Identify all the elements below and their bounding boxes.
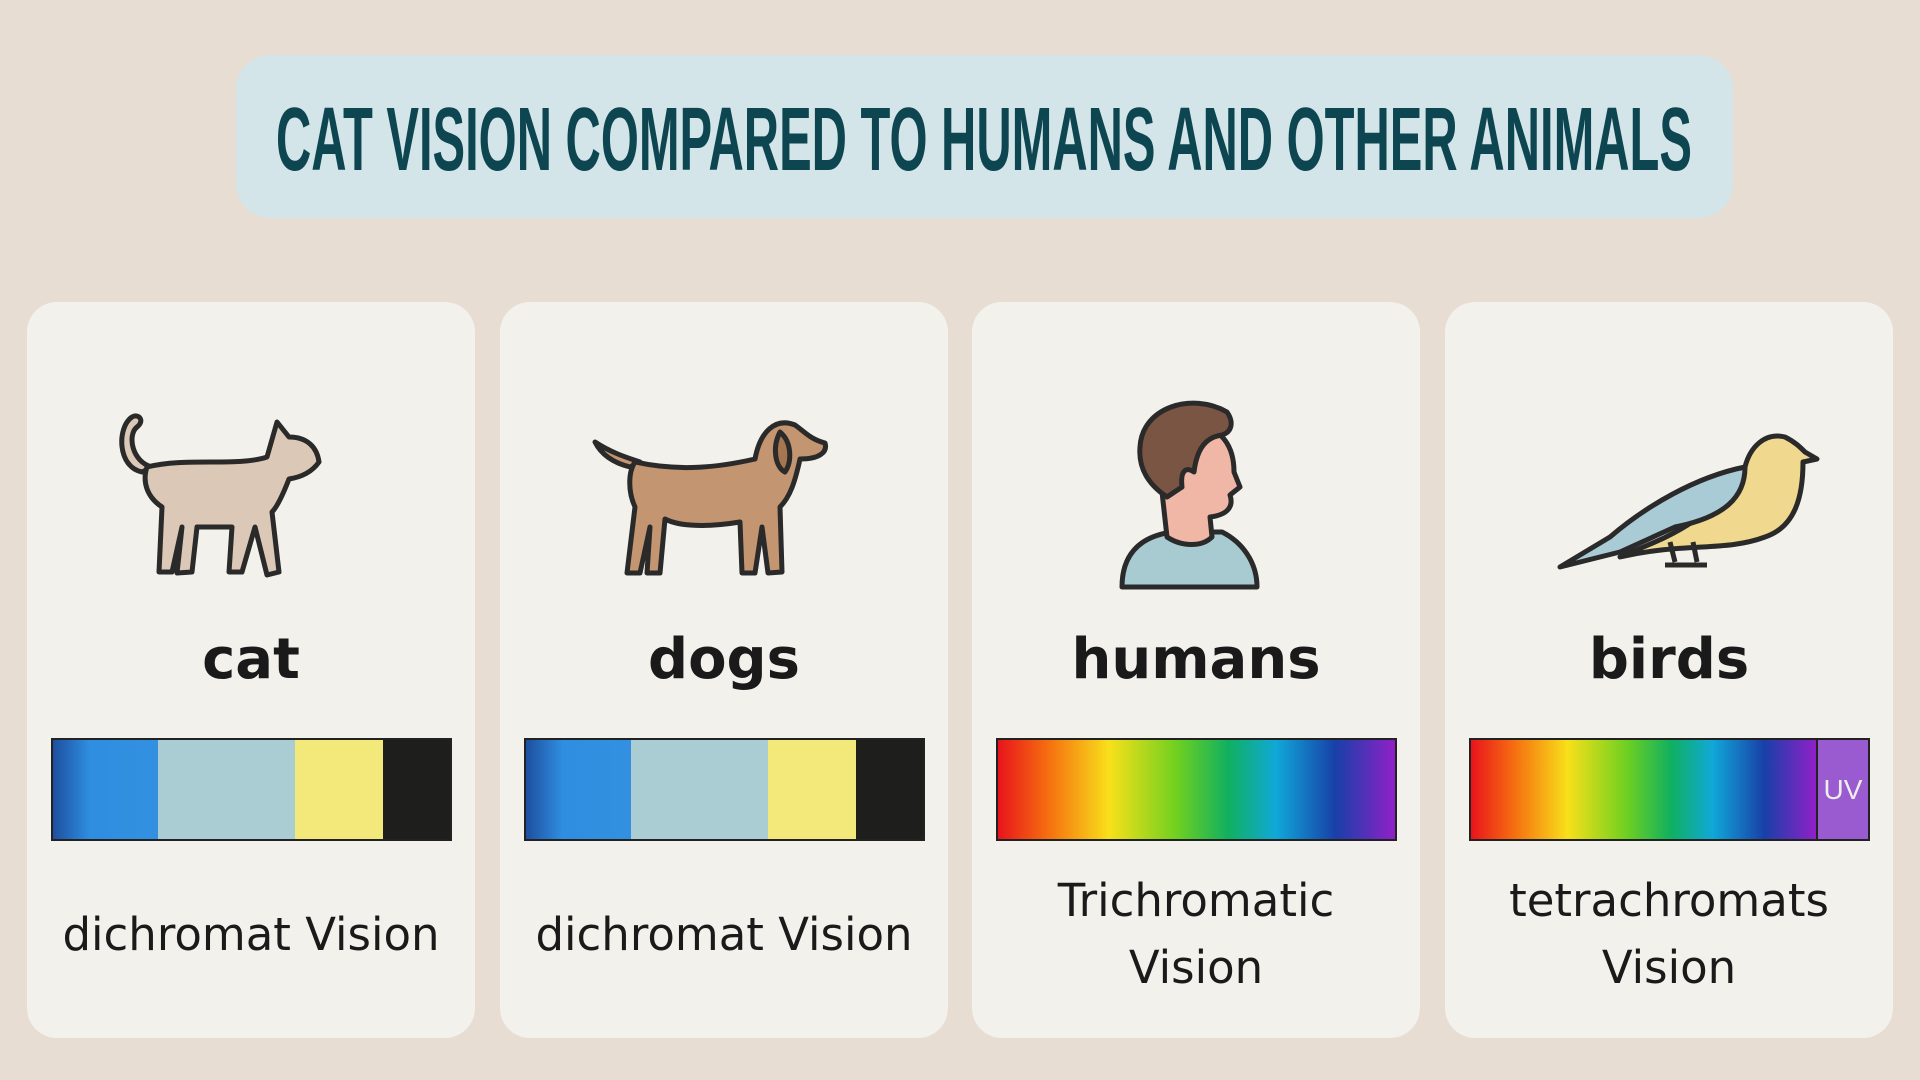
text: humans vision: Vision [1129,941,1263,994]
panel: cat [27,302,475,1038]
text: dogs vision: dichromat Vision [535,908,913,961]
text: birds vision [1509,874,1829,994]
text: cat vision: dichromat Vision [62,908,440,961]
panel: humans [972,302,1420,1038]
color bar: humans [996,738,1397,841]
title banner [236,55,1733,218]
color bar: cat [51,738,452,841]
text: birds vision: tetrachromats [1509,874,1829,927]
label: birds: birds [1589,627,1749,692]
text: birds vision: Vision [1602,941,1736,994]
icon: dog [592,420,828,576]
panel: dogs [500,302,948,1038]
label: cat: cat [202,627,300,692]
color bar: dogs [524,738,925,841]
color bar: birds [1469,738,1870,841]
color bar: birds: UV [1824,774,1862,804]
text: humans vision [1058,874,1334,994]
icon: human [1120,400,1260,590]
icon: cat [119,413,322,578]
label: humans: humans [1071,627,1321,692]
icon: bird [1558,434,1820,570]
panel: birds [1445,302,1893,1038]
label: dogs: dogs [648,627,800,692]
text: humans vision: Trichromatic [1058,874,1334,927]
